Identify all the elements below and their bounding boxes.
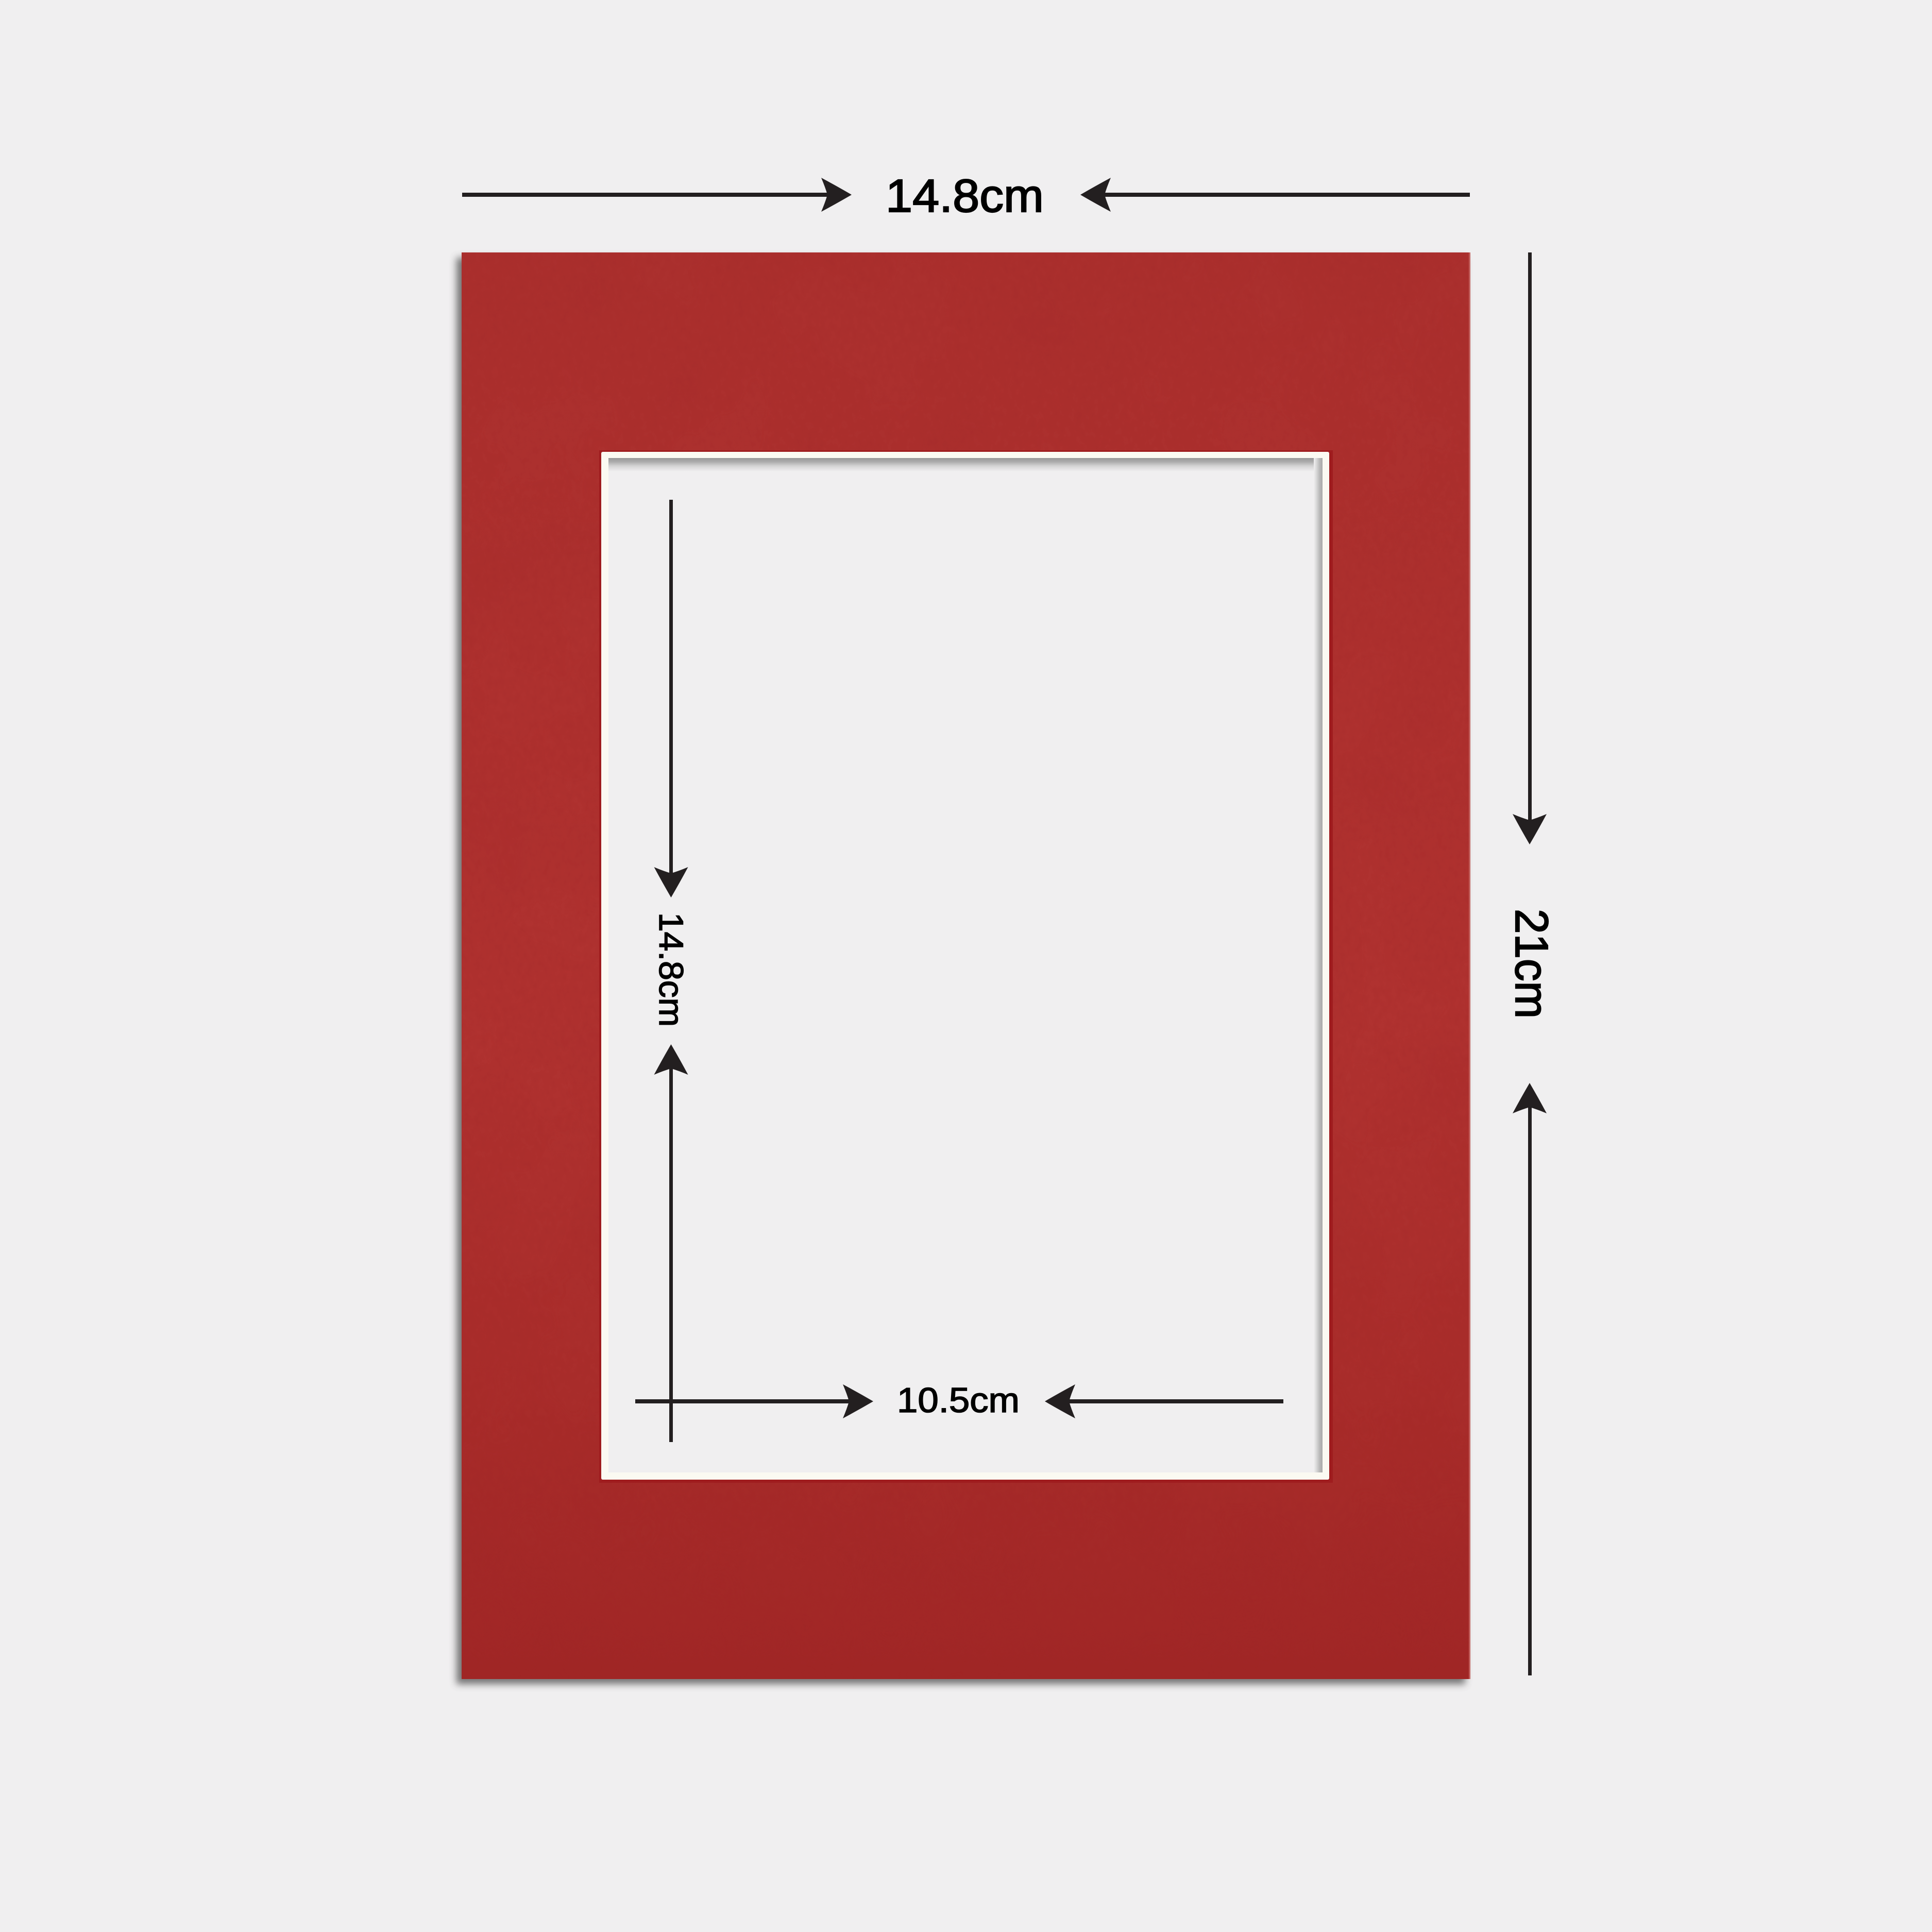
panel: red mount board with window [456, 252, 1470, 1684]
label: aperture height: 14.8cm [652, 912, 690, 1027]
arrow: aperture width, left side [635, 1384, 873, 1418]
mount board [462, 252, 1470, 1679]
window white core [601, 452, 1329, 1480]
window bevel shade [599, 450, 1333, 1483]
arrow: outer width, right side [1080, 178, 1470, 212]
label: aperture width: 10.5cm [897, 1381, 1020, 1420]
arrow: outer height, top side [1513, 252, 1547, 844]
window top inner shadow [608, 458, 1323, 471]
window opening [608, 458, 1323, 1472]
paper grain [462, 252, 1470, 1679]
arrow: outer height, bottom side [1513, 1083, 1547, 1675]
window right inner shadow [1314, 458, 1323, 1472]
label: outer width: 14.8cm [886, 171, 1044, 222]
right edge highlight [1469, 252, 1470, 1679]
arrow: aperture height, top side [654, 500, 688, 897]
arrow: aperture height, bottom side [654, 1044, 688, 1442]
arrow: aperture width, right side [1045, 1384, 1283, 1418]
label: outer height: 21cm [1505, 909, 1557, 1019]
paper mottling [462, 252, 1470, 1679]
mount drop shadow [456, 258, 1465, 1684]
arrow: outer width, left side [462, 178, 852, 212]
